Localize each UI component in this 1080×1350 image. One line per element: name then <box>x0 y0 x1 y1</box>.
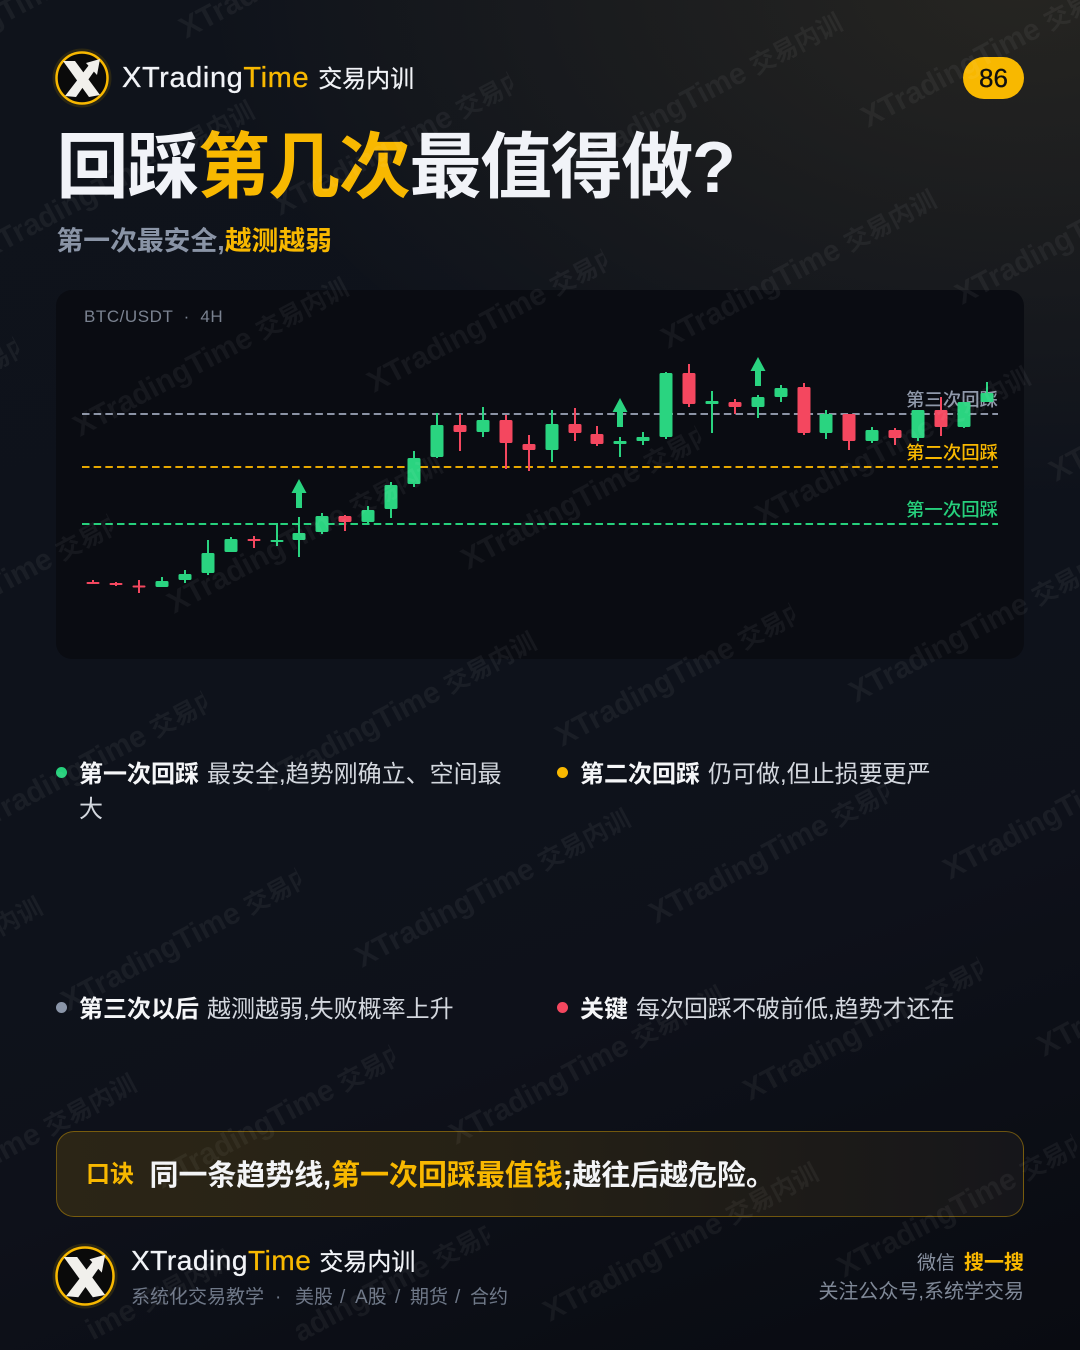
footer brand name: XTradingTime 交易内训 <box>131 1245 415 1276</box>
footer follow note: 关注公众号,系统学交易 <box>818 1281 1024 1303</box>
bullet text: 第三次以后 越测越弱,失败概率上升 <box>79 996 454 1023</box>
footer wechat search: 微信 搜一搜 <box>917 1252 1024 1274</box>
watermark pattern: XTradingTime 交易内训 <box>538 1155 824 1328</box>
watermark pattern: XTradingTime 交易内训 <box>644 757 930 930</box>
level label: second pullback: 第二次回踩 <box>906 442 998 463</box>
bullet: key point <box>557 996 955 1023</box>
watermark pattern: ime <box>80 1289 149 1347</box>
orange dot <box>557 766 568 778</box>
watermark pattern: XTradingTime 交易内训 <box>750 359 1036 532</box>
watermark pattern: XTradingTime 交易内训 <box>162 447 448 620</box>
subtitle: 第一次最安全,越测越弱 <box>56 226 332 256</box>
level label: third pullback: 第三次回踩 <box>906 389 998 410</box>
watermark pattern: 交易内训 <box>135 1246 237 1318</box>
footer tagline: / <box>455 1287 460 1308</box>
footer tagline: / <box>340 1287 345 1308</box>
footer tagline <box>131 1286 508 1308</box>
watermark pattern: XTradingTime 交易内训 <box>444 978 730 1151</box>
watermark pattern: XTradingTime 交易内训 <box>562 5 848 178</box>
bullet text: 第二次回踩 仍可做,但止损要更严 <box>580 761 931 788</box>
bullet: first pullback <box>56 761 502 823</box>
panel: candlestick chart <box>56 290 1024 659</box>
bullet: third pullback and later <box>56 996 454 1023</box>
watermark pattern: XTradingTime 交易内训 <box>56 845 342 1018</box>
bullet text: 第一次回踩 最安全,趋势刚确立、空间最 <box>79 761 502 788</box>
issue number badge: 86 <box>979 63 1008 93</box>
footer tagline: 期货 <box>410 1287 448 1308</box>
callout text: 同一条趋势线,第一次回踩最值钱;越往后越危险。 <box>150 1160 775 1192</box>
bullet text: 大 <box>79 796 103 823</box>
watermark pattern: XTradingTime 交易内训 <box>738 934 1024 1107</box>
grey dot <box>56 1002 67 1012</box>
watermark pattern: XTradingTime 交易内训 <box>256 624 542 797</box>
arrow: first pullback entry <box>292 479 306 508</box>
watermark pattern: 交易内训 <box>429 1202 531 1274</box>
header logo <box>52 48 112 108</box>
bullet text <box>79 761 502 823</box>
watermark pattern: XTradingTime 交易内训 <box>550 580 836 753</box>
callout label: 口诀 <box>86 1161 134 1188</box>
level line: second pullback <box>82 466 998 468</box>
watermark pattern: XTradingTime 交易内训 <box>150 1022 436 1195</box>
arrow: third pullback entry <box>750 357 766 386</box>
chart symbol label: BTC/USDT · 4H <box>84 307 223 326</box>
level line: first pullback <box>82 523 998 525</box>
watermark pattern: XTradingTime 交易内训 <box>456 403 742 576</box>
footer tagline: · <box>275 1287 281 1308</box>
red candles <box>86 364 948 593</box>
bullet: second pullback <box>557 761 931 788</box>
green candles <box>156 372 994 587</box>
level label: first pullback: 第一次回踩 <box>906 499 998 520</box>
red dot <box>557 1002 568 1012</box>
footer tagline: A股 <box>355 1287 387 1308</box>
watermark pattern: XTradingTime 交易内训 <box>268 49 554 222</box>
footer tagline: 合约 <box>470 1287 508 1308</box>
level line: third pullback <box>82 413 998 415</box>
watermark pattern: XTradingTime 交易内训 <box>362 226 648 399</box>
header brand name: XTradingTime 交易内训 <box>122 62 414 94</box>
footer tagline: 系统化交易教学 <box>131 1287 264 1308</box>
watermark pattern: adingTime <box>288 1245 443 1349</box>
green dot <box>56 766 67 778</box>
watermark pattern: XTradingTime 交易内训 <box>656 182 942 355</box>
watermark pattern: XTradingTime 交易内训 <box>68 270 354 443</box>
footer tagline: 美股 <box>295 1287 333 1308</box>
arrow: second pullback entry <box>612 398 628 427</box>
bullet text: 关键 每次回踩不破前低,趋势才还在 <box>580 996 955 1023</box>
issue number badge <box>963 57 1024 99</box>
footer logo <box>52 1244 118 1308</box>
footer tagline: / <box>395 1287 400 1308</box>
title: 回踩第几次最值得做? <box>56 128 734 208</box>
callout: mnemonic <box>56 1131 1024 1217</box>
watermark pattern: XTradingTime 交易内训 <box>350 801 636 974</box>
